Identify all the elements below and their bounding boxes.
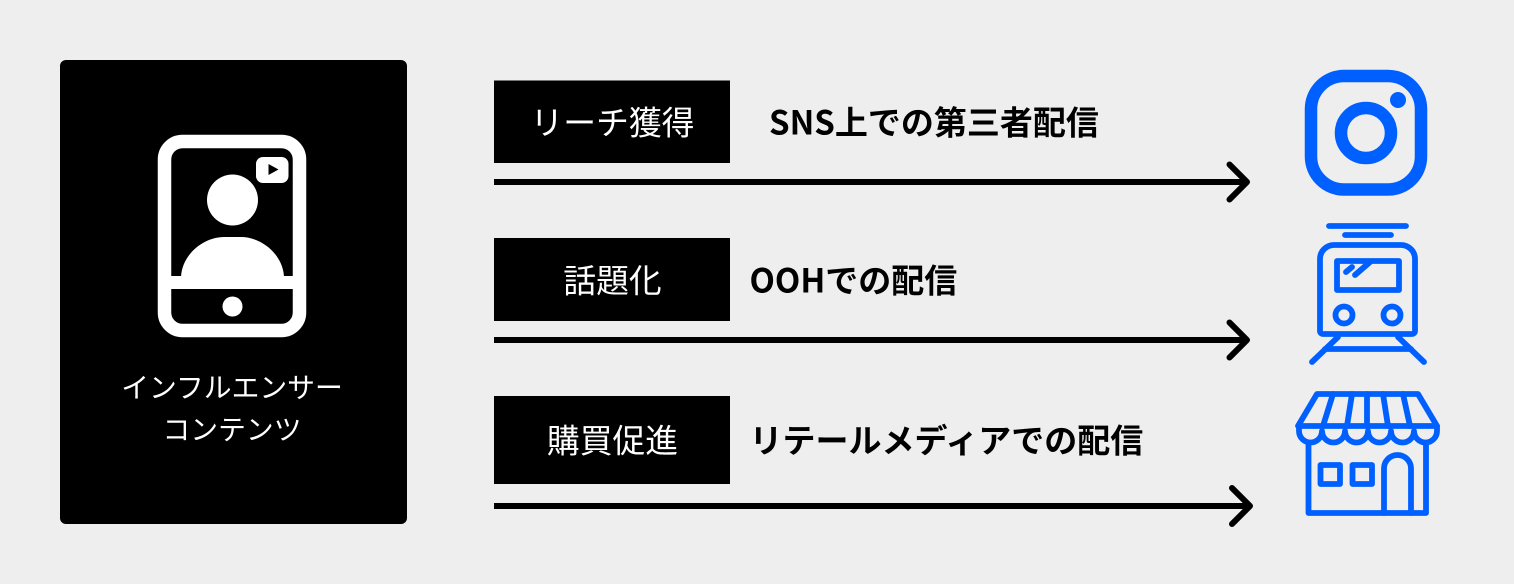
arrow 2 xyxy=(494,322,1247,358)
row 2: buzz xyxy=(494,238,1247,358)
side label: インフルエンサー xyxy=(121,366,343,406)
arrow 3 xyxy=(494,488,1250,524)
side label xyxy=(121,366,343,448)
icon: storefront xyxy=(1298,394,1437,513)
arrow 1 xyxy=(494,164,1247,200)
icon: train xyxy=(1312,226,1424,362)
label box: reach xyxy=(494,80,730,163)
row 1: reach xyxy=(494,80,1247,200)
label box: purchase: 購買促進 xyxy=(547,416,678,462)
label box: purchase xyxy=(494,396,730,484)
description: retail media: リテールメディアでの配信 xyxy=(750,414,1143,462)
label box: reach: リーチ獲得 xyxy=(531,98,694,144)
label box: buzz xyxy=(494,238,730,321)
label box: buzz: 話題化 xyxy=(563,256,662,302)
row 3: purchase xyxy=(494,396,1250,524)
icon: instagram xyxy=(1311,76,1421,190)
description: SNS: SNS上での第三者配信 xyxy=(769,96,1099,144)
side label: コンテンツ xyxy=(162,408,302,448)
description: OOH: OOHでの配信 xyxy=(750,254,957,302)
icon: smartphone with person and video badge xyxy=(164,142,300,330)
panel: influencer content xyxy=(60,60,407,524)
